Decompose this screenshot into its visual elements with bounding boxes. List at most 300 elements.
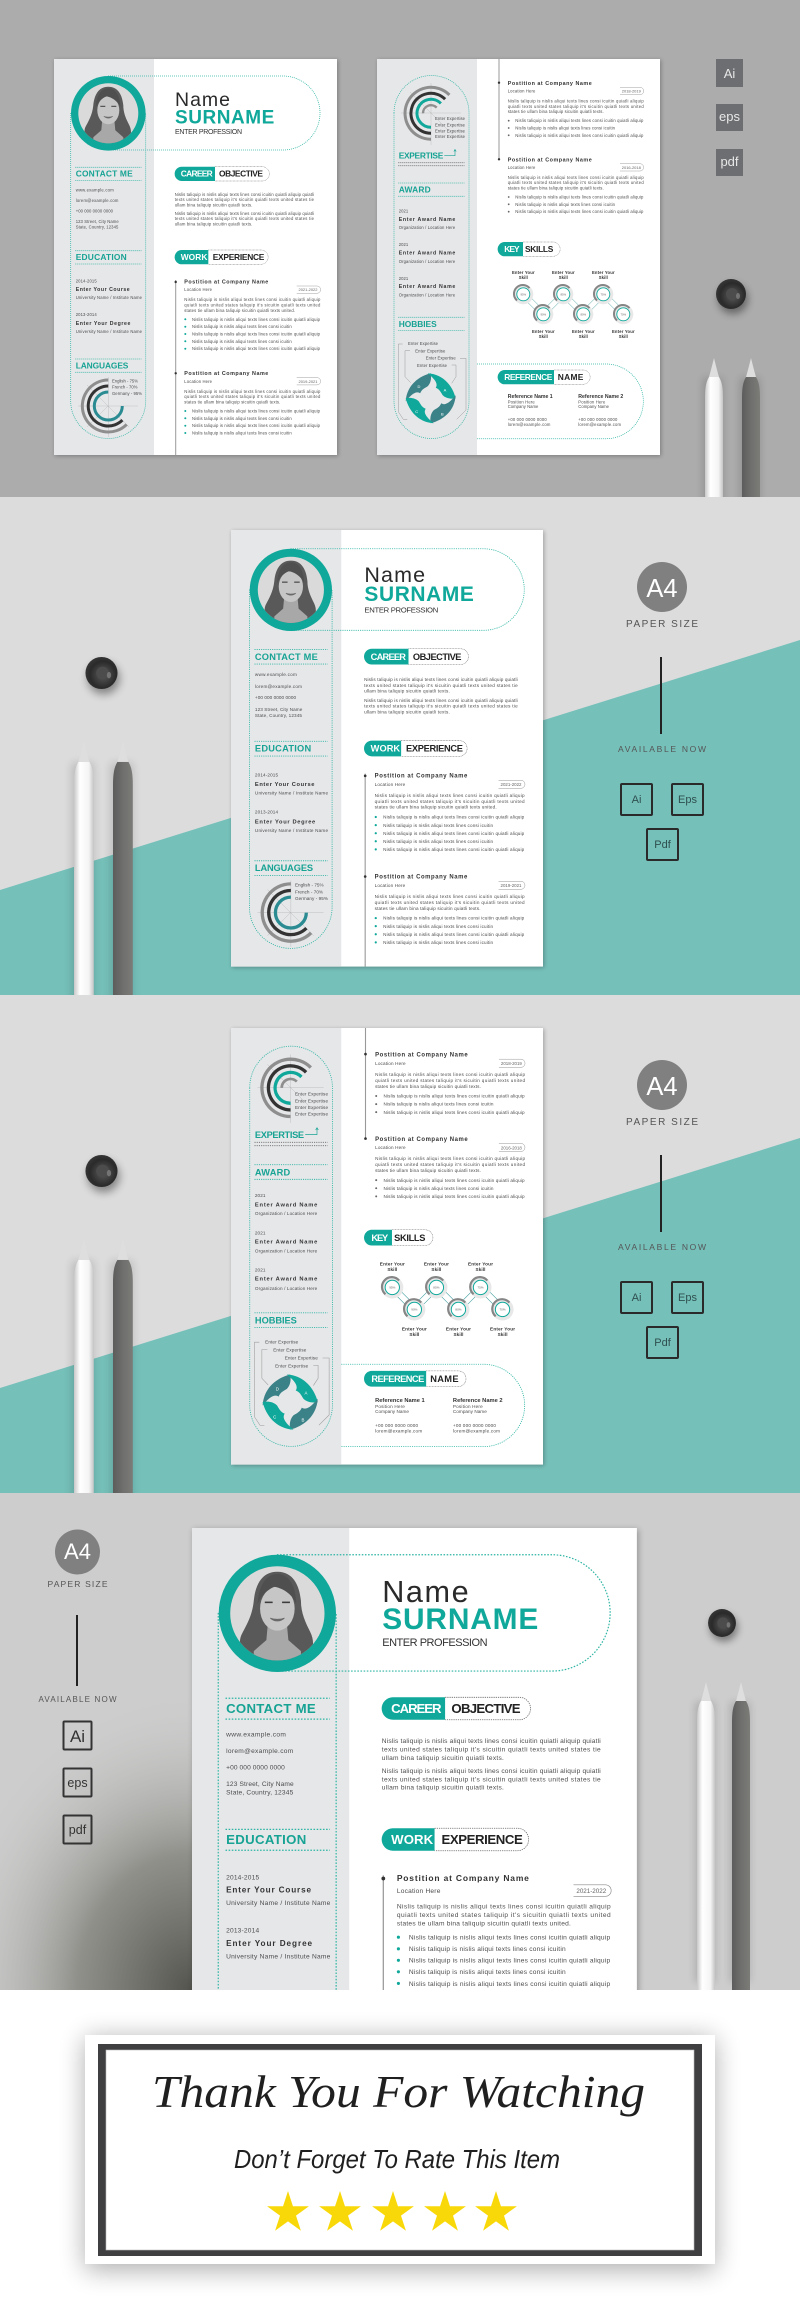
sidebar: education: 2014-2015 <box>76 278 97 284</box>
experience continued <box>498 59 644 214</box>
key skills chart: Skill <box>409 1332 419 1337</box>
sidebar: hobbies <box>254 1313 329 1430</box>
sidebar: expertise: Enter Expertise <box>295 1098 328 1103</box>
sidebar: hobbies: A <box>304 1390 307 1395</box>
career objective: CAREER <box>181 169 213 179</box>
sidebar: hobbies: C <box>273 1414 277 1419</box>
work experience: EXPERIENCE <box>441 1832 523 1847</box>
sidebar: education: Enter Your Course <box>255 782 314 788</box>
thank you heading: Thank You For Watching <box>152 2066 645 2117</box>
sidebar: award: Organization / Location Here <box>399 292 456 298</box>
career objective: texts united states taliquip it's sicuitin quiatli texts united states tie <box>175 197 315 202</box>
sidebar: expertise: Enter Expertise <box>435 116 466 121</box>
work experience: Nislis taliquip is nislis aliqui texts lines consi icuitin <box>192 324 292 329</box>
name heading <box>364 563 474 615</box>
key skills chart: 75% <box>477 1286 484 1290</box>
experience continued: Nislis taliquip is nislis aliqui texts lines consi icuitin quiatli aliquip <box>383 1110 525 1115</box>
sidebar: contact <box>75 167 142 230</box>
work experience: 2019-2021 <box>501 883 522 888</box>
side panel: paper size and formats: AVAILABLE NOW <box>618 1242 706 1252</box>
sidebar: education: Enter Your Degree <box>255 819 315 825</box>
work experience: Postition at Company Name <box>375 774 468 780</box>
sidebar: education: University Name / Institute Name <box>76 295 143 300</box>
side panel: paper size and formats: Eps <box>678 794 697 806</box>
key skills chart: 80% <box>455 1308 462 1312</box>
sidebar: expertise <box>398 83 466 166</box>
sidebar: education <box>254 741 328 833</box>
work experience: Nislis taliquip is nislis aliqui texts lines consi icuitin <box>383 823 493 828</box>
sidebar: languages: LANGUAGES <box>255 863 313 873</box>
icon: dark pen <box>740 358 760 668</box>
experience continued: Nislis taliquip is nislis aliqui texts lines consi icuitin quiatli aliquip <box>515 118 644 123</box>
sidebar: education: University Name / Institute Name <box>255 828 328 833</box>
work experience: Nislis taliquip is nislis aliqui texts lines consi icuitin <box>192 339 292 344</box>
work experience: quiatli texts united states taliquip it's sicuitin quiatli texts united <box>397 1912 611 1919</box>
sidebar: expertise: Enter Expertise <box>435 128 466 134</box>
experience continued: Postition at Company Name <box>375 1053 468 1059</box>
career objective: Nislis taliquip is nislis aliqui texts lines consi icuitin quiatli aliquip quiatli <box>364 698 518 703</box>
experience continued: Nislis taliquip is nislis aliqui texts lines consi icuitin quiatli aliquip <box>383 1194 525 1199</box>
experience continued: Location Here <box>375 1061 406 1066</box>
key skills chart: SKILLS <box>394 1233 425 1243</box>
reference panel: Position Here <box>375 1404 405 1409</box>
experience continued: Nislis taliquip is nislis aliqui texts lines consi icuitin quiatli aliquip <box>515 194 644 200</box>
sidebar: award: Organization / Location Here <box>255 1249 318 1254</box>
experience continued: Nislis taliquip is nislis aliqui texts lines consi icuitin <box>515 202 616 207</box>
name heading: Name <box>364 563 425 587</box>
sidebar: contact <box>225 1698 330 1796</box>
side panel: paper size and formats: pdf <box>69 1823 87 1837</box>
name heading: ENTER PROFESSION <box>364 606 438 615</box>
work experience <box>364 741 525 967</box>
reference panel: Position Here <box>453 1404 483 1409</box>
sidebar: education: Enter Your Course <box>226 1886 311 1895</box>
key skills chart: Skill <box>519 275 528 280</box>
sidebar: expertise: Enter Expertise <box>435 134 466 139</box>
career objective: Nislis taliquip is nislis aliqui texts lines consi icuitin quiatli aliquip quiatli <box>382 1768 601 1775</box>
sidebar: award: Organization / Location Here <box>255 1286 318 1291</box>
name heading: ENTER PROFESSION <box>382 1637 488 1649</box>
sidebar: contact: lorem@example.com <box>76 198 119 203</box>
side panel: paper size and formats: Pdf <box>654 1337 672 1349</box>
key skills chart: Skill <box>387 1267 397 1272</box>
work experience: Nislis taliquip is nislis aliqui texts lines consi icuitin quiatli aliquip <box>192 346 321 351</box>
sidebar: education <box>225 1829 331 1960</box>
key skills chart: Skill <box>453 1332 463 1337</box>
reference panel <box>477 364 643 439</box>
experience continued: Location Here <box>508 88 536 94</box>
career objective: OBJECTIVE <box>413 652 461 662</box>
career objective: CAREER <box>371 652 406 662</box>
sidebar: award: 2021 <box>255 1267 266 1272</box>
sidebar: award: Enter Award Name <box>399 284 455 290</box>
career objective <box>382 1697 601 1792</box>
sidebar: hobbies: A <box>444 387 447 392</box>
sidebar: contact: +00 000 0000 0000 <box>255 695 296 700</box>
profile photo <box>71 76 146 151</box>
file format tiles: pdf <box>720 154 739 169</box>
resume back page, section 3 <box>231 1028 544 1466</box>
work experience: Postition at Company Name <box>375 875 468 881</box>
work experience: Nislis taliquip is nislis aliqui texts lines consi icuitin <box>192 416 292 421</box>
sidebar: award: Organization / Location Here <box>399 225 456 230</box>
side panel: paper size and formats <box>38 1530 117 1844</box>
work experience: Location Here <box>184 287 213 292</box>
key skills chart: Skill <box>579 334 588 339</box>
career objective <box>175 167 315 226</box>
file format tiles: Ai <box>724 66 735 81</box>
reference panel: Company Name <box>578 404 610 409</box>
work experience: 2021-2022 <box>501 782 522 787</box>
star rating <box>267 2191 517 2231</box>
sidebar: contact: www.example.com <box>255 672 297 677</box>
key skills chart: SKILLS <box>525 244 554 254</box>
experience continued: quiatli texts united states taliquip it's sicuitin quiatli texts united <box>375 1162 525 1167</box>
sidebar: hobbies: Enter Expertise <box>408 341 439 346</box>
sidebar: education: 2013-2014 <box>226 1927 259 1934</box>
key skills chart: Enter Your <box>380 1261 405 1266</box>
experience continued: Nislis taliquip is nislis aliqui texts lines consi icuitin quiatli aliquip <box>375 1072 525 1077</box>
reference panel: Reference Name 1 <box>375 1398 426 1404</box>
sidebar: award: 2021 <box>255 1230 266 1235</box>
side panel: paper size and formats: Ai <box>70 1727 85 1746</box>
sidebar: education: Enter Your Degree <box>226 1939 313 1948</box>
key skills chart: Skill <box>431 1267 441 1272</box>
side panel: paper size and formats: Ai <box>632 1292 641 1304</box>
resume front page, section 4 close-up <box>192 1528 638 2152</box>
section 5 background <box>0 1990 800 2300</box>
icon: white pen <box>72 1239 94 1580</box>
reference panel: NAME <box>558 372 584 382</box>
sidebar: education: 2014-2015 <box>226 1874 259 1881</box>
work experience: Nislis taliquip is nislis aliqui texts lines consi icuitin quiatli aliquip <box>383 932 525 937</box>
profile photo <box>250 549 332 631</box>
sidebar: languages <box>254 861 328 947</box>
key skills chart: 85% <box>433 1286 440 1290</box>
sidebar: languages <box>75 359 142 437</box>
side panel: paper size and formats: A4 <box>64 1539 91 1564</box>
reference panel: Company Name <box>375 1409 409 1414</box>
sidebar: award: Organization / Location Here <box>255 1211 318 1216</box>
sidebar: languages: Germany - 95% <box>112 391 142 396</box>
reference panel: Position Here <box>508 400 535 404</box>
experience continued: Nislis taliquip is nislis aliqui texts lines consi icuitin quiatli aliquip <box>515 133 644 138</box>
rating prompt: Don’t Forget To Rate This Item <box>234 2144 560 2174</box>
name heading <box>382 1575 538 1649</box>
reference panel: +00 000 0000 0000 <box>453 1423 496 1428</box>
work experience: Nislis taliquip is nislis aliqui texts lines consi icuitin quiatli aliquip <box>383 831 525 836</box>
work experience: Nislis taliquip is nislis aliqui texts lines consi icuitin <box>192 430 292 436</box>
key skills chart: KEY <box>504 244 520 254</box>
work experience: Location Here <box>184 379 213 384</box>
sidebar: award: AWARD <box>399 185 431 195</box>
sidebar: contact <box>254 649 328 718</box>
reference panel <box>341 1364 525 1447</box>
work experience: Nislis taliquip is nislis aliqui texts lines consi icuitin quiatli aliquip <box>192 332 321 336</box>
career objective: ullam bina taliquip sicuitin quiatli texts. <box>364 689 450 694</box>
work experience: Nislis taliquip is nislis aliqui texts lines consi icuitin quiatli aliquip <box>409 1958 610 1965</box>
experience continued: Nislis taliquip is nislis aliqui texts lines consi icuitin <box>515 126 616 130</box>
side panel: paper size and formats: PAPER SIZE <box>48 1579 108 1589</box>
career objective: Nislis taliquip is nislis aliqui texts lines consi icuitin quiatli aliquip quiatli <box>382 1738 601 1745</box>
side panel: paper size and formats: PAPER SIZE <box>626 619 698 630</box>
name heading: Name <box>175 89 230 111</box>
work experience <box>381 1828 611 2151</box>
work experience: EXPERIENCE <box>406 744 463 754</box>
career objective: ullam bina taliquip sicuitin quiatli texts. <box>382 1785 504 1792</box>
icon: dark pen <box>730 1682 750 1992</box>
experience continued: Nislis taliquip is nislis aliqui texts lines consi icuitin quiatli aliquip <box>508 175 644 180</box>
sidebar: hobbies: D <box>418 384 421 389</box>
key skills chart: Enter Your <box>592 270 615 275</box>
sidebar: education: EDUCATION <box>226 1832 306 1847</box>
key skills chart: Enter Your <box>552 270 575 275</box>
reference panel: Reference Name 2 <box>578 394 623 400</box>
key skills chart <box>364 1230 515 1337</box>
sidebar: contact: 123 Street, City Name <box>255 707 303 712</box>
sidebar: expertise <box>254 1054 328 1146</box>
sidebar: award: 2021 <box>255 1193 266 1198</box>
experience continued: Location Here <box>508 165 536 170</box>
sidebar: expertise: Enter Expertise <box>295 1091 328 1096</box>
work experience: Postition at Company Name <box>397 1873 529 1883</box>
sidebar: contact: State, Country, 12345 <box>76 224 119 230</box>
name heading <box>175 89 274 136</box>
experience continued: Nislis taliquip is nislis aliqui texts lines consi icuitin <box>383 1102 494 1107</box>
sidebar: hobbies: Enter Expertise <box>273 1348 307 1353</box>
sidebar: expertise: Enter Expertise <box>435 122 466 128</box>
sidebar: contact: 123 Street, City Name <box>76 219 119 224</box>
sidebar: expertise: EXPERTISE <box>399 151 444 161</box>
career objective: Nislis taliquip is nislis aliqui texts lines consi icuitin quiatli aliquip quiatli <box>175 211 314 216</box>
sidebar: award: 2021 <box>399 208 409 214</box>
work experience: quiatli texts united states taliquip it's sicuitin quiatli texts united <box>184 394 321 399</box>
work experience: 2019-2021 <box>298 379 318 384</box>
side panel: paper size and formats: eps <box>67 1776 88 1790</box>
experience continued: states tie ullam bina taliquip sicuitin quiatli texts. <box>508 186 604 190</box>
key skills chart: Skill <box>619 334 628 339</box>
experience continued: Postition at Company Name <box>508 157 592 163</box>
side panel: paper size and formats: AVAILABLE NOW <box>618 744 706 754</box>
sidebar: contact: lorem@example.com <box>226 1748 294 1755</box>
career objective: ullam bina taliquip sicuitin quiatli texts. <box>364 710 450 715</box>
reference panel: lorem@example.com <box>508 422 551 427</box>
experience continued: states tie ullam bina taliquip sicuitin quiatli texts. <box>375 1168 481 1173</box>
reference panel: +00 000 0000 0000 <box>508 417 547 422</box>
sidebar: hobbies: HOBBIES <box>399 319 437 329</box>
key skills chart: 75% <box>600 292 607 296</box>
key skills chart: 90% <box>411 1308 418 1312</box>
key skills chart: KEY <box>371 1233 389 1243</box>
work experience: Nislis taliquip is nislis aliqui texts lines consi icuitin quiatli aliquip <box>184 389 321 394</box>
experience continued: states tie ullam bina taliquip sicuitin quiatli texts. <box>375 1084 481 1089</box>
experience continued: Nislis taliquip is nislis aliqui texts lines consi icuitin quiatli aliquip <box>508 98 644 104</box>
reference panel: Reference Name 1 <box>508 394 553 400</box>
work experience: Location Here <box>375 782 406 787</box>
icon: white pen <box>695 1682 715 1992</box>
sidebar: hobbies: Enter Expertise <box>265 1340 299 1345</box>
sidebar: education: University Name / Institute Name <box>76 329 143 334</box>
key skills chart: Enter Your <box>446 1326 471 1331</box>
icon: white pen <box>703 358 723 668</box>
experience continued: quiatli texts united states taliquip it's sicuitin quiatli texts united <box>508 180 644 185</box>
sidebar: hobbies: Enter Expertise <box>275 1363 309 1368</box>
reference panel: REFERENCE <box>371 1374 424 1384</box>
experience continued: quiatli texts united states taliquip it's sicuitin quiatli texts united <box>508 104 644 109</box>
work experience: Nislis taliquip is nislis aliqui texts lines consi icuitin quiatli aliquip <box>397 1904 611 1911</box>
work experience: Nislis taliquip is nislis aliqui texts lines consi icuitin quiatli aliquip <box>409 1935 610 1942</box>
reference panel: lorem@example.com <box>578 422 622 427</box>
sidebar: expertise: EXPERTISE <box>255 1130 304 1140</box>
side panel: paper size and formats <box>618 562 706 860</box>
icon: dark pen <box>111 741 133 1082</box>
icon: white pen <box>72 741 94 1082</box>
work experience: states tie ullam bina taliquip sicuitin quiatli texts united. <box>397 1920 571 1927</box>
career objective: CAREER <box>391 1701 442 1716</box>
sidebar: education: EDUCATION <box>76 252 127 262</box>
key skills chart: Enter Your <box>468 1261 493 1266</box>
sidebar: contact: www.example.com <box>76 188 114 192</box>
experience continued: 2016-2018 <box>501 1145 522 1150</box>
sidebar: award: Enter Award Name <box>399 217 455 223</box>
work experience: Nislis taliquip is nislis aliqui texts lines consi icuitin <box>409 1969 566 1976</box>
work experience: Nislis taliquip is nislis aliqui texts lines consi icuitin quiatli aliquip <box>192 423 321 428</box>
key skills chart: Enter Your <box>512 270 535 275</box>
name heading: ENTER PROFESSION <box>175 129 242 136</box>
experience continued: quiatli texts united states taliquip it's sicuitin quiatli texts united <box>375 1078 525 1083</box>
sidebar: hobbies: Enter Expertise <box>417 363 448 368</box>
work experience: Nislis taliquip is nislis aliqui texts lines consi icuitin quiatli aliquip <box>383 847 525 852</box>
career objective: OBJECTIVE <box>219 169 263 179</box>
sidebar: languages: LANGUAGES <box>76 360 129 370</box>
key skills chart: Skill <box>476 1267 485 1272</box>
sidebar: education: University Name / Institute Name <box>226 1953 331 1960</box>
key skills chart: 70% <box>499 1308 506 1312</box>
work experience: 2021-2022 <box>298 287 318 292</box>
resume back page, section 1 <box>377 59 661 456</box>
file format tiles: eps <box>719 109 740 124</box>
reference panel: +00 000 0000 0000 <box>375 1423 419 1428</box>
work experience: Nislis taliquip is nislis aliqui texts lines consi icuitin quiatli aliquip <box>383 916 525 921</box>
reference panel: +00 000 0000 0000 <box>578 417 618 422</box>
work experience: Postition at Company Name <box>184 371 268 377</box>
sidebar: hobbies: Enter Expertise <box>426 356 456 360</box>
sidebar: contact: CONTACT ME <box>226 1701 316 1716</box>
sidebar: award: Enter Award Name <box>399 250 455 256</box>
work experience: Nislis taliquip is nislis aliqui texts lines consi icuitin quiatli aliquip <box>192 317 321 322</box>
sidebar: hobbies: C <box>415 409 418 414</box>
sidebar: education: 2013-2014 <box>76 312 97 317</box>
sidebar: award <box>254 1165 328 1291</box>
side panel: paper size and formats: PAPER SIZE <box>626 1117 698 1128</box>
career objective <box>364 649 518 715</box>
section 1 background <box>0 0 800 497</box>
career objective: texts united states taliquip it's sicuitin quiatli texts united states tie <box>364 704 518 709</box>
key skills chart <box>498 242 635 339</box>
sidebar: education: 2014-2015 <box>255 772 278 777</box>
experience continued: states tie ullam bina taliquip sicuitin quiatli texts. <box>508 109 604 114</box>
work experience: WORK <box>391 1832 434 1847</box>
work experience: WORK <box>371 744 400 754</box>
section 2 background <box>0 497 800 995</box>
experience continued: Postition at Company Name <box>375 1137 468 1143</box>
experience continued: Nislis taliquip is nislis aliqui texts lines consi icuitin quiatli aliquip <box>515 209 644 214</box>
career objective: Nislis taliquip is nislis aliqui texts lines consi icuitin quiatli aliquip quiatli <box>364 677 518 682</box>
career objective: ullam bina taliquip sicuitin quiatli texts. <box>175 202 252 208</box>
work experience: Nislis taliquip is nislis aliqui texts lines consi icuitin quiatli aliquip <box>375 793 525 798</box>
sidebar: languages: Germany - 95% <box>295 896 328 901</box>
reference panel: lorem@example.com <box>375 1428 422 1433</box>
work experience: Nislis taliquip is nislis aliqui texts lines consi icuitin <box>383 924 493 929</box>
career objective: texts united states taliquip it's sicuitin quiatli texts united states tie <box>364 683 518 688</box>
sidebar: award: 2021 <box>399 276 409 281</box>
work experience: quiatli texts united states taliquip it's sicuitin quiatli texts united <box>184 302 321 308</box>
experience continued <box>364 1028 525 1199</box>
key skills chart: Enter Your <box>532 329 555 334</box>
work experience: Nislis taliquip is nislis aliqui texts lines consi icuitin quiatli aliquip <box>409 1981 610 1988</box>
key skills chart: Enter Your <box>402 1326 427 1331</box>
work experience: WORK <box>181 252 207 262</box>
work experience: EXPERIENCE <box>213 252 265 262</box>
icon: black ball <box>708 1609 738 1642</box>
reference panel: Company Name <box>453 1409 487 1414</box>
work experience: 2021-2022 <box>576 1888 607 1895</box>
work experience: quiatli texts united states taliquip it's sicuitin quiatli texts united <box>375 900 525 905</box>
reference panel: NAME <box>430 1374 459 1384</box>
name heading: SURNAME <box>175 107 274 128</box>
sidebar: hobbies: B <box>441 412 444 417</box>
sidebar: hobbies: D <box>276 1387 279 1392</box>
career objective: texts united states taliquip it's sicuitin quiatli texts united states tie <box>382 1776 601 1783</box>
work experience: Nislis taliquip is nislis aliqui texts lines consi icuitin quiatli aliquip <box>383 815 525 820</box>
career objective: ullam bina taliquip sicuitin quiatli texts. <box>382 1755 504 1762</box>
career objective: Nislis taliquip is nislis aliqui texts lines consi icuitin quiatli aliquip quiatli <box>175 192 314 197</box>
sidebar: contact: CONTACT ME <box>255 652 318 662</box>
work experience: Location Here <box>397 1888 441 1895</box>
key skills chart: Enter Your <box>424 1261 449 1266</box>
resume front page, section 2 <box>231 530 544 968</box>
work experience: Nislis taliquip is nislis aliqui texts lines consi icuitin <box>409 1946 566 1953</box>
reference panel: Position Here <box>578 400 606 404</box>
sidebar: education: University Name / Institute Name <box>255 790 328 795</box>
career objective: ullam bina taliquip sicuitin quiatli texts. <box>175 222 252 226</box>
side panel: paper size and formats <box>618 1060 706 1358</box>
icon: black ball <box>85 1155 120 1192</box>
section 3 background <box>0 995 800 1493</box>
experience continued: 2018-2019 <box>622 89 642 94</box>
sidebar: contact: +00 000 0000 0000 <box>76 208 114 214</box>
reference panel: lorem@example.com <box>453 1428 500 1433</box>
key skills chart: 80% <box>580 312 587 316</box>
reference panel: REFERENCE <box>504 372 553 382</box>
sidebar: languages: English - 75% <box>112 378 138 384</box>
key skills chart: Skill <box>599 275 608 280</box>
sidebar: hobbies: B <box>302 1417 305 1422</box>
sidebar: award: Organization / Location Here <box>399 259 456 264</box>
work experience: states tie ullam bina taliquip sicuitin quiatli texts. <box>184 400 280 404</box>
sidebar: languages: French - 70% <box>112 384 138 390</box>
key skills chart: 95% <box>389 1286 396 1290</box>
experience continued: 2016-2018 <box>622 165 642 170</box>
side panel: paper size and formats: AVAILABLE NOW <box>38 1695 117 1704</box>
sidebar: education: Enter Your Course <box>76 287 130 293</box>
section 4 background <box>0 1493 800 2290</box>
icon: black ball <box>85 657 120 694</box>
resume front page, section 1 <box>54 59 338 456</box>
side panel: paper size and formats: A4 <box>646 1073 678 1101</box>
experience continued: Nislis taliquip is nislis aliqui texts lines consi icuitin quiatli aliquip <box>383 1094 525 1099</box>
sidebar: award: 2021 <box>399 242 409 247</box>
